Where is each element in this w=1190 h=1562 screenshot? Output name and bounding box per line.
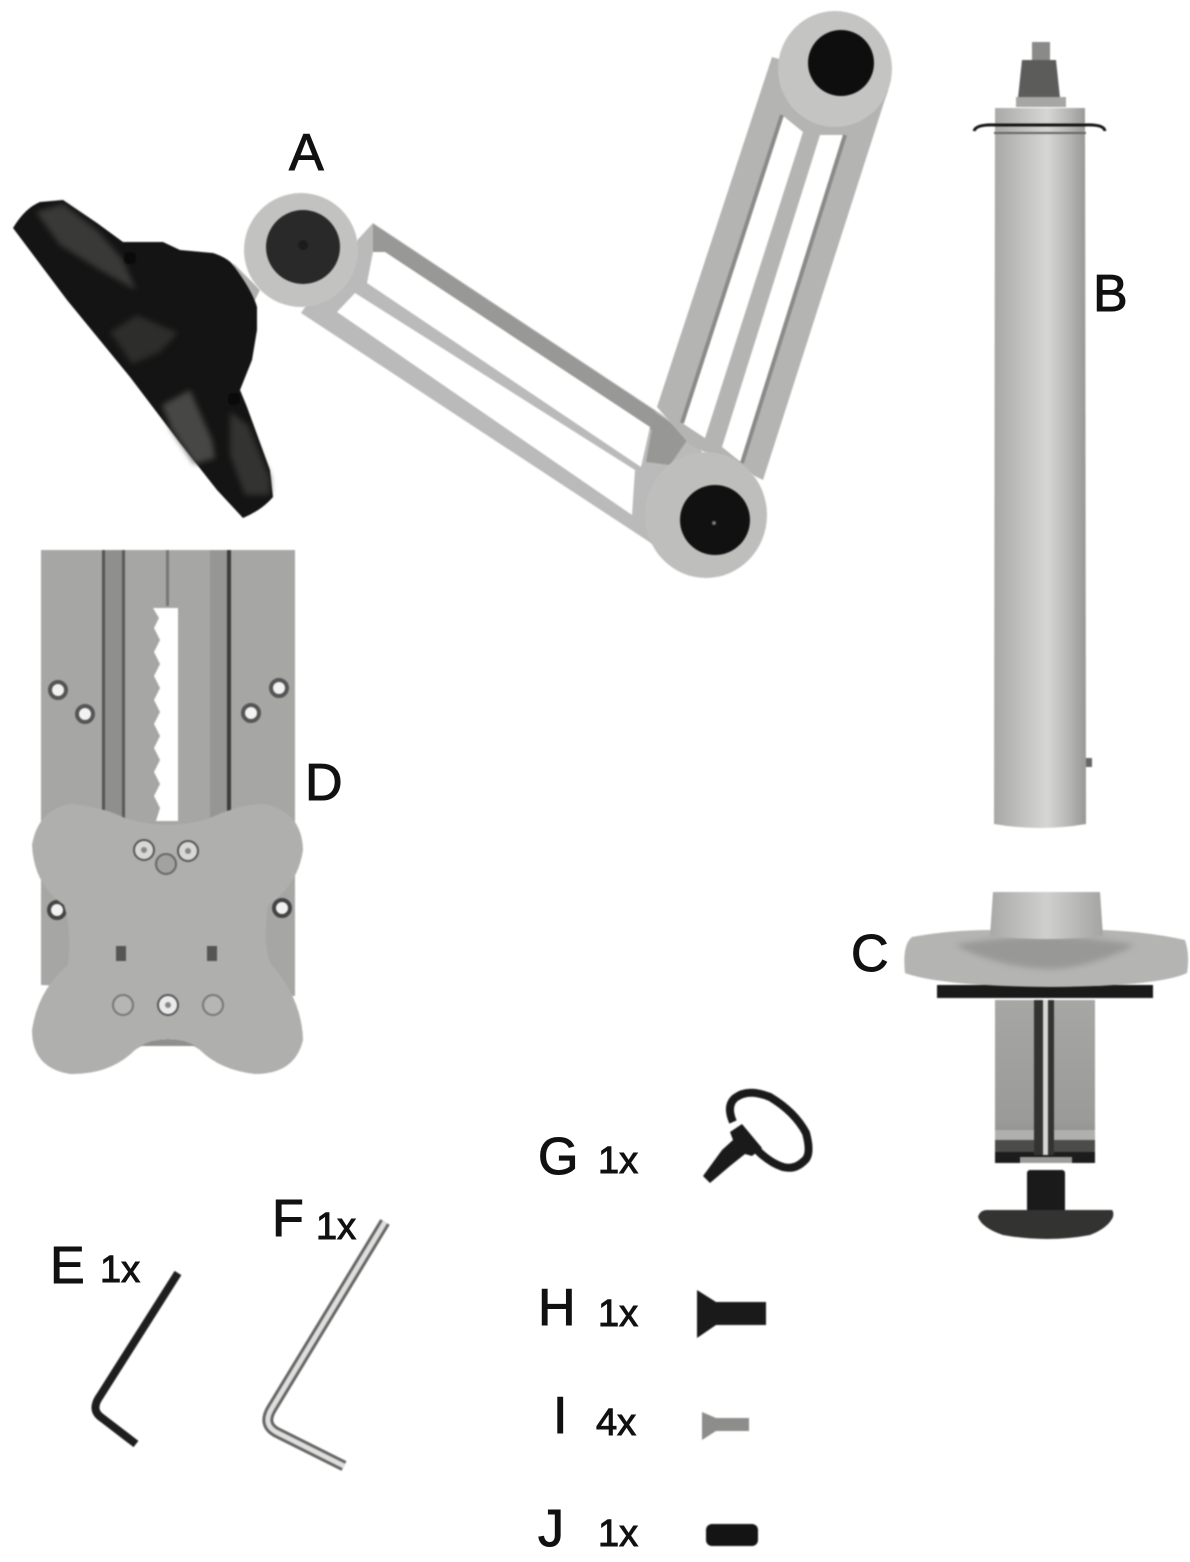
part B: column bbox=[974, 42, 1105, 828]
label J 1x: 1x bbox=[598, 1513, 638, 1555]
part G: key pin bbox=[703, 1093, 809, 1183]
joint: lower disk bbox=[645, 452, 767, 578]
label D: D bbox=[305, 754, 343, 812]
joint: upper disk bbox=[778, 11, 892, 127]
label C: C bbox=[851, 925, 889, 983]
label G 1x: 1x bbox=[598, 1140, 638, 1182]
label I 4x bbox=[553, 1387, 636, 1445]
arm A lower section bbox=[301, 223, 720, 575]
label G 1x bbox=[538, 1128, 638, 1186]
part I: small screw bbox=[702, 1412, 749, 1440]
label I 4x: 4x bbox=[596, 1402, 636, 1444]
arm A upper section bbox=[657, 57, 888, 480]
label B: B bbox=[1093, 265, 1128, 323]
label I 4x: I bbox=[553, 1387, 567, 1445]
joint: left disk bbox=[244, 193, 358, 307]
label H 1x bbox=[538, 1279, 638, 1337]
part J: dark plug bbox=[706, 1524, 758, 1546]
part D: mounting plate bbox=[32, 550, 303, 1074]
icon: tilt head of arm A bbox=[13, 200, 273, 518]
label F 1x: F bbox=[272, 1190, 304, 1248]
label H 1x: H bbox=[538, 1279, 576, 1337]
label F 1x: 1x bbox=[316, 1206, 356, 1248]
label A: A bbox=[289, 124, 324, 182]
label H 1x: 1x bbox=[598, 1293, 638, 1335]
label G 1x: G bbox=[538, 1128, 578, 1186]
label E 1x: 1x bbox=[100, 1249, 140, 1291]
part F: silver hex key bbox=[268, 1222, 385, 1466]
label E 1x: E bbox=[50, 1237, 85, 1295]
label J 1x: J bbox=[538, 1500, 564, 1558]
label J 1x bbox=[538, 1500, 638, 1558]
part H: countersunk screw bbox=[697, 1290, 766, 1338]
label E 1x bbox=[50, 1237, 140, 1295]
label F 1x bbox=[272, 1190, 356, 1248]
part C: desk clamp bbox=[904, 892, 1188, 1239]
part E: dark hex key bbox=[95, 1273, 178, 1444]
